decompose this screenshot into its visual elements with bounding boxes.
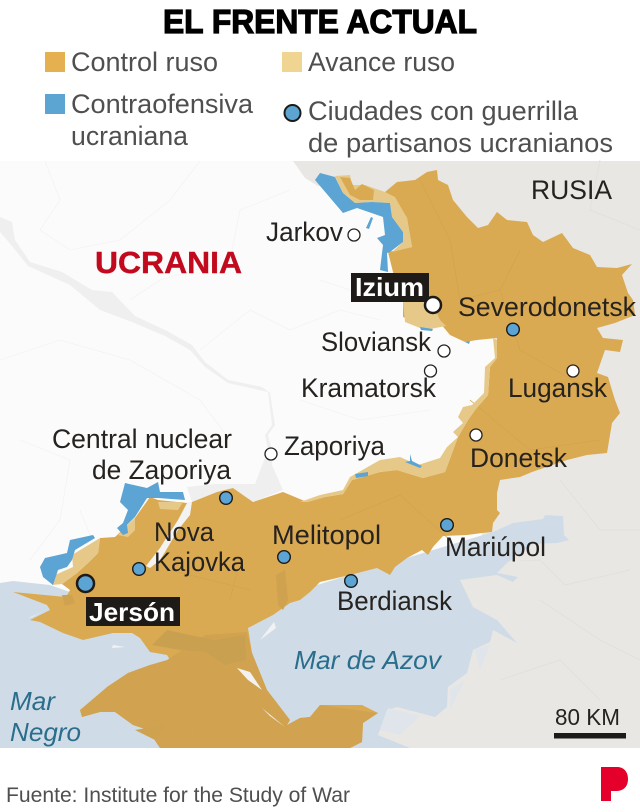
contraofensiva ucraniana polygons xyxy=(40,173,470,585)
river dnipro xyxy=(0,217,283,502)
label: central nuclear de zaporiya: Central nuclear xyxy=(52,424,232,454)
legend xyxy=(45,47,613,158)
legend: contraofensiva ucraniana: ucraniana xyxy=(71,121,189,151)
label: central nuclear de zaporiya: de Zaporiya xyxy=(92,455,231,485)
scale bar: 80 KM xyxy=(555,704,620,730)
strait bits xyxy=(28,612,285,727)
city: berdiansk: Berdiansk xyxy=(337,586,453,616)
label: mar negro xyxy=(10,686,81,747)
city: donetsk xyxy=(470,429,568,473)
legend: ciudades con guerrilla: de partisanos ucranianos xyxy=(308,128,613,158)
avance ruso polygons xyxy=(52,175,497,585)
legend: contraofensiva ucraniana xyxy=(45,89,254,151)
city: lugansk: Lugansk xyxy=(508,373,608,403)
taman and small lagoons xyxy=(380,645,490,735)
city: melitopol: Melitopol xyxy=(272,520,381,550)
legend: control ruso: Control ruso xyxy=(71,47,218,77)
russia land xyxy=(293,161,640,748)
city: severodonetsk: Severodonetsk xyxy=(458,292,637,322)
label: ucrania: UCRANIA xyxy=(95,245,242,280)
relief patches xyxy=(152,630,246,665)
sea xyxy=(0,515,569,748)
label: mar de azov: Mar de Azov xyxy=(294,645,443,675)
control ruso xyxy=(13,170,635,748)
legend: avance ruso: Avance ruso xyxy=(308,47,455,77)
kakhovka reservoir xyxy=(146,502,192,568)
city: nova kajovka: Kajovka xyxy=(154,547,245,577)
city: izium xyxy=(351,272,441,313)
city: izium: Izium xyxy=(355,272,424,302)
city: mariupol: Mariúpol xyxy=(445,532,546,562)
legend: ciudades con guerrilla xyxy=(284,96,613,158)
label: mar negro: Mar xyxy=(10,686,56,716)
city: jerson: Jersón xyxy=(89,597,175,627)
control patch north xyxy=(340,177,374,200)
legend: ciudades con guerrilla: Ciudades con guerrilla xyxy=(308,96,579,126)
legend: contraofensiva ucraniana: Contraofensiva xyxy=(71,89,254,119)
city: severodonetsk xyxy=(458,292,637,336)
city: nova kajovka xyxy=(133,517,245,577)
label: central nuclear de zaporiya xyxy=(52,424,232,485)
city: jarkov: Jarkov xyxy=(266,217,344,247)
label: rusia: RUSIA xyxy=(531,175,612,205)
scale bar xyxy=(554,704,626,738)
crimea shading xyxy=(80,632,378,748)
city: donetsk: Donetsk xyxy=(470,443,568,473)
logo xyxy=(601,767,628,801)
city: sloviansk: Sloviansk xyxy=(321,327,432,357)
city: melitopol xyxy=(272,520,381,563)
source: Fuente: Institute for the Study of War xyxy=(6,784,350,807)
city: mariupol xyxy=(441,519,546,562)
city: zaporiya: Zaporiya xyxy=(284,431,385,461)
title: EL FRENTE ACTUAL xyxy=(163,3,477,40)
city: jerson xyxy=(77,575,180,627)
city: kramatorsk: Kramatorsk xyxy=(301,373,437,403)
label: mar negro: Negro xyxy=(10,717,81,747)
marker: central nuclear xyxy=(220,492,232,504)
city: nova kajovka: Nova xyxy=(154,517,214,547)
